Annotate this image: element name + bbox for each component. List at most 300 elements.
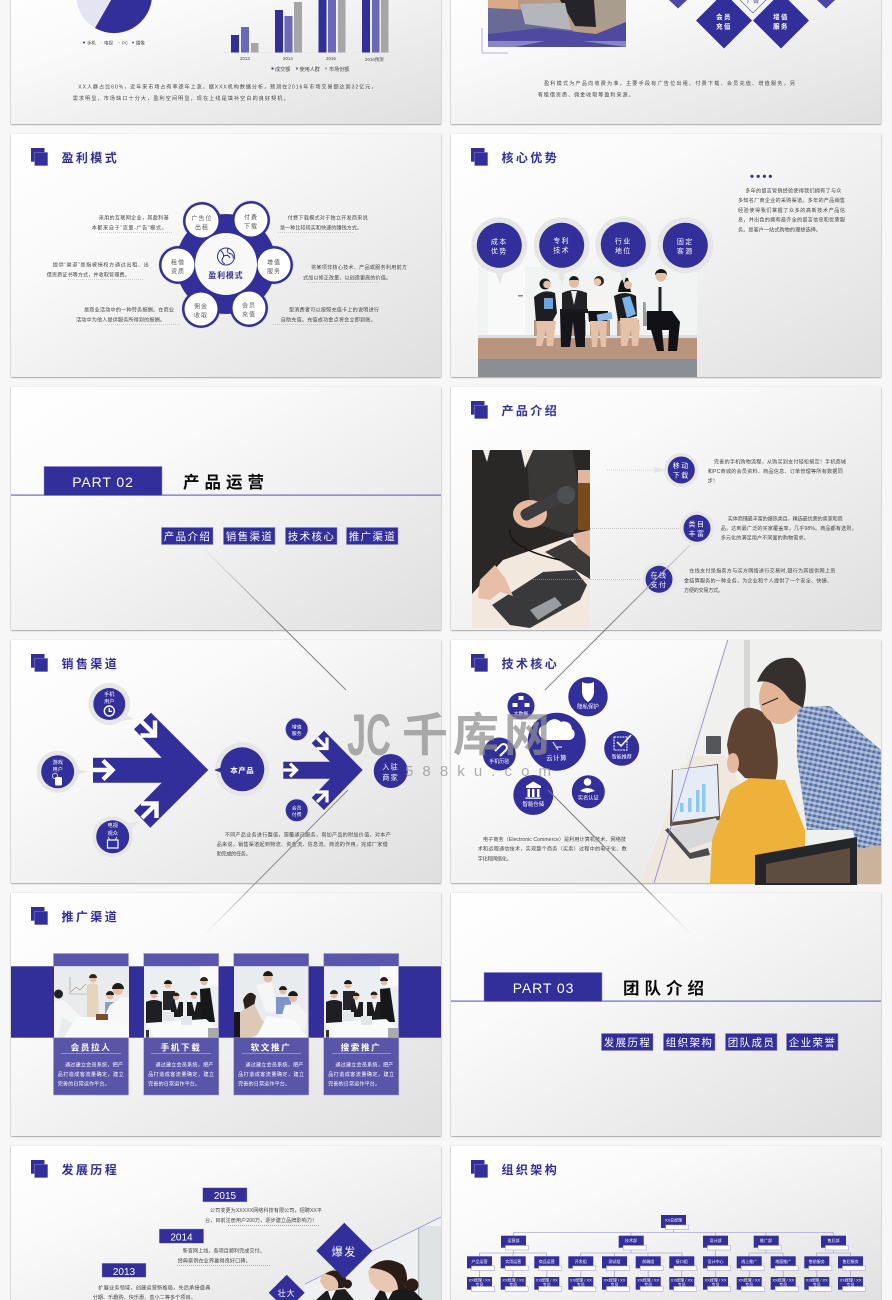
diamond: member recharge: 充值 [716, 22, 732, 30]
badge: mobile download: 移动 [673, 461, 690, 470]
text: channel note: 品来说，销售渠道起到物流、资金流、信息流、商流的作用，完成厂家借 [217, 841, 388, 848]
node: value-added: 增值 [267, 258, 281, 266]
dashed connector [531, 470, 680, 579]
pin: industry position: 行业 [615, 236, 632, 246]
man [757, 658, 881, 883]
heading icon [471, 401, 488, 419]
tag: technology [286, 528, 337, 544]
four dots [750, 175, 772, 178]
slide: core advantages [451, 134, 881, 377]
text: online payment [684, 568, 835, 594]
staff row: 专员 [745, 1281, 753, 1287]
text: rich categories: 品，达到最广泛的买家覆盖率，几乎98%。商品都有选则， [721, 525, 857, 532]
photo: five people seated [478, 267, 697, 377]
badge: rich categories: 丰富 [688, 529, 706, 538]
heading icon [31, 1160, 48, 1178]
text: advantages [738, 188, 845, 234]
bar legend: 使用人群 [300, 66, 320, 73]
card: soft promotion: 通过建立会员系统，把产 [245, 1062, 303, 1068]
text: e-commerce: 电子商务（Electronic Commerce）是利用计算机技术、网络技 [483, 836, 626, 843]
year 2013 [102, 1263, 146, 1278]
heading icon [31, 148, 48, 166]
text: mobile download: 完善的手机购物流程，从购买到支付轻松搞定！手机商城 [714, 458, 846, 466]
section line [451, 1000, 881, 1002]
node: recharge [232, 292, 266, 324]
node: promotion [754, 1236, 781, 1250]
team row: 测试组 [608, 1258, 620, 1264]
tag: history [602, 1034, 653, 1050]
text: e-commerce: 术和远程通信技术，实现整个商务（买卖）过程中的电子化、数 [478, 846, 627, 853]
navy band [11, 966, 441, 1038]
org chart [467, 1215, 866, 1291]
section slide: part 03 [451, 893, 881, 1136]
text: 2014: 新官网上线，各项目顺利完成交付。 [183, 1248, 265, 1254]
staff row: 专员 [577, 1281, 585, 1287]
slide: profit overview [451, 0, 881, 124]
node: paid download: 下载 [244, 222, 258, 230]
tag: honors [786, 1034, 838, 1050]
text: 2014 [177, 1248, 270, 1266]
text: profit summary: 有租借资质、佣金收取等盈利来源。 [538, 92, 634, 99]
node: operations: 运营部 [508, 1237, 520, 1243]
badge: tv viewers: 观众 [108, 830, 118, 837]
text: 2015: 公司变更为XXXXX网络科技有限公司，招聘XX平 [210, 1207, 322, 1214]
arrow: small three-way [283, 731, 363, 810]
node: design [703, 1236, 730, 1250]
bar chart: 2013 [240, 56, 250, 61]
team row: 线上推广 [741, 1258, 757, 1264]
badge: member payment: 会员 [292, 804, 302, 812]
chair [755, 837, 857, 885]
text: profit summary: 盈利模式为产品向收费为准，主要手段有广告位出租、付费下载、会员充值、增值服务，另 [544, 80, 795, 87]
connectors [480, 1228, 850, 1277]
text: mobile download: 和PC商城的会员资料、商品信息、订单管理等所有数据同 [708, 468, 843, 475]
staff row: XX经理 / XX [704, 1276, 727, 1282]
badge: big data: 大数据 [514, 710, 528, 717]
badge: member payment [285, 799, 308, 822]
node: after-sales [821, 1236, 848, 1250]
text: mobile download [708, 458, 846, 485]
text: channel note: 助完成的任务。 [217, 851, 251, 858]
photo: two businesswomen [300, 1217, 441, 1300]
badge: real-name [572, 775, 605, 808]
slide: profit model [11, 134, 441, 377]
staff row: XX经理 / XX [570, 1276, 592, 1282]
text: 2014: 经典案例在业界赢得良好口碑。 [178, 1257, 251, 1264]
staff row: XX经理 / XX [772, 1276, 795, 1282]
woman [710, 708, 805, 883]
text: market analysis: 需求明显，市场缺口十分大，盈利空间明显，现在上线是填补空白的良好契机。 [73, 95, 289, 102]
badge: real-name: 实名认证 [578, 794, 599, 802]
node: general manager [661, 1215, 689, 1230]
badge: value-added service: 增值 [292, 724, 302, 730]
text: mobile download: 步！ [708, 479, 718, 485]
team row: 商品运营 [539, 1258, 555, 1264]
note: leasing: 提供“渠道”是指被授权方通过出租、出 [53, 262, 149, 268]
badge: mobile users: 手机 [104, 690, 115, 698]
slide: technology core [451, 640, 881, 885]
pin: cost advantage: 成本 [491, 237, 508, 246]
photo: two people at laptop [640, 640, 881, 885]
bar chart: 2016预测 [365, 56, 384, 63]
card: mobile download: 品打造成客流量确定，建立 [148, 1071, 214, 1078]
bar chart [223, 0, 397, 63]
badge: this product: 本产品 [230, 765, 254, 775]
pie legend: 电视 [104, 40, 113, 46]
text: online payment: 在线支付是指卖方与买方网络进行交易时,银行为其提供网上资 [689, 568, 835, 575]
section title: 产品运营 [183, 473, 269, 492]
bar legend: 市场份额 [329, 66, 349, 73]
badge: game users: 用户 [53, 765, 63, 773]
heading icon [471, 654, 488, 672]
pin: patent technology: 专利 [553, 236, 570, 245]
note: value-added [303, 264, 407, 282]
tag: product intro [162, 528, 213, 544]
card: mobile download: 手机下载 [161, 1041, 201, 1052]
note: leasing: 借资质证书等方式，并收取管理费。 [47, 272, 130, 278]
tag: members: 团队成员 [728, 1036, 775, 1049]
photo: team at table [324, 966, 398, 1038]
badge: cloud computing [528, 713, 586, 771]
badge: online payment [642, 562, 676, 596]
staff row: 专员 [678, 1281, 686, 1287]
staff row: 专员 [476, 1281, 484, 1287]
node: ad space: 出租 [195, 224, 209, 232]
staff row: 专员 [779, 1281, 787, 1287]
year 2015 [203, 1188, 247, 1202]
card: soft promotion: 品打造成客流量确定，建立 [238, 1071, 304, 1078]
heading: 发展历程 [62, 1162, 119, 1177]
slide: market data charts [11, 0, 441, 124]
text: e-commerce [478, 836, 627, 862]
team row: 设计中心 [708, 1258, 724, 1264]
tag: promotion: 推广渠道 [349, 530, 396, 543]
diamond: partial [669, 0, 687, 8]
node: commission: 收取 [194, 312, 208, 320]
text: 2013 [93, 1284, 210, 1300]
note: recharge: 型消费者可以按照充值卡上的说明进行 [289, 306, 379, 314]
badge: merchant: 入驻 [382, 762, 399, 772]
diamond: member recharge [696, 0, 752, 48]
note: advertising: 采用的互联网企业，其盈利基 [99, 214, 169, 222]
person 4 [614, 278, 640, 346]
text: 2015 [205, 1207, 322, 1225]
badge: game users: 游戏 [53, 758, 63, 766]
node: leasing: 租借 [171, 258, 185, 266]
tag: organization: 组织架构 [666, 1036, 713, 1049]
badge: smart storage: 智能仓储 [523, 800, 545, 808]
staff row: XX经理 / XX [839, 1276, 862, 1282]
staff row [467, 1276, 866, 1291]
card: search promotion: 完善的日常运作平台。 [328, 1081, 380, 1088]
text: channel note: 不同产品业务进行整值，需覆通已服务，增加产品的附加价值，对本产 [225, 831, 391, 838]
person 3 [588, 276, 613, 347]
badge: privacy: 隐私保护 [577, 702, 599, 710]
icon: globe [218, 248, 234, 265]
bar legend: 成交额 [275, 66, 290, 73]
diamond: value-added service: 增值 [773, 12, 789, 21]
node: technology [619, 1236, 646, 1250]
heading: 核心优势 [502, 150, 559, 165]
person 2 [560, 276, 589, 347]
card: soft promotion: 软文推广 [251, 1041, 291, 1052]
text: advantages: 多年的留言管销经验使得我们拥有了与众 [745, 188, 841, 194]
node: ad space [186, 204, 218, 238]
card: search promotion: 搜索推广 [341, 1041, 381, 1052]
text: rich categories [721, 516, 857, 542]
node: paid download [234, 204, 268, 236]
accent line [654, 640, 728, 883]
pin: stable customers: 客源 [677, 246, 694, 256]
text: advantages: 多知名厂商企业的采购渠道。多年的产品销售 [738, 197, 845, 204]
pin: cost advantage: 优势 [491, 246, 508, 256]
team row: 售前服务 [809, 1258, 825, 1264]
badge: cloud computing: 云计算 [546, 753, 567, 762]
part label: PART 02 [72, 474, 134, 490]
team row: 开发组 [575, 1258, 587, 1264]
card: soft promotion: 完善的日常运作平台。 [238, 1081, 290, 1088]
team row: 前端组 [642, 1258, 654, 1264]
heading: 推广渠道 [62, 909, 119, 924]
note: value-added: 将某项非核心技术、产品或服务利用前方 [311, 264, 407, 271]
heading: 盈利模式 [62, 150, 119, 165]
text: advantages: 息，并出色的拥有最齐全的留言信息和优质服 [738, 217, 845, 224]
badge: mobile download: 下载 [673, 470, 690, 480]
photo: laptop meeting [488, 0, 626, 47]
staff row: XX经理 / XX [671, 1276, 693, 1282]
staff row: XX经理 / XX [637, 1276, 660, 1282]
badge: merchant: 商家 [382, 773, 399, 782]
part label [44, 466, 162, 496]
staff row: 专员 [543, 1281, 551, 1287]
node: technology: 技术部 [625, 1237, 637, 1243]
note: recharge: 自助充值。充值成功金点将会立即到账。 [281, 316, 376, 324]
node: recharge: 会员 [242, 302, 256, 310]
text: market analysis: XX人群占比60%，近年来市场占有率逐年上涨。据XXX机构数据分析，预测在2016年市场交易额达到32亿元， [78, 84, 376, 91]
watermark logo and text: JC [347, 703, 391, 768]
badge: merchant [374, 754, 408, 788]
pin: stable customers [657, 217, 713, 273]
badge: mobile verify [483, 738, 516, 770]
person 1 [534, 278, 557, 346]
staff row: 专员 [509, 1281, 517, 1287]
pin: industry position: 地位 [615, 246, 632, 255]
text: profit summary [538, 80, 795, 99]
year 2013: 2013 [113, 1267, 136, 1278]
diamond: burst [316, 1223, 372, 1279]
pie legend: 摄像 [136, 40, 145, 46]
note: value-added: 式加以修正改量，以创造更高的价值。 [303, 274, 391, 282]
node: after-sales: 售后部 [828, 1237, 840, 1243]
diamond: value-added service: 服务 [773, 22, 789, 30]
badge: rich categories: 类目 [688, 520, 706, 528]
node: leasing [162, 248, 194, 282]
staff row: 专员 [813, 1281, 821, 1287]
slide: sales channels [11, 640, 441, 883]
text: e-commerce: 字化和网络化。 [478, 855, 512, 862]
diamond: member recharge: 会员 [716, 12, 732, 21]
note: commission: 是商业活动中的一种劳务报酬。在商业 [84, 306, 174, 314]
watermark diagonal lines [201, 545, 693, 936]
tag: promotion [346, 528, 398, 544]
heading icon [31, 654, 48, 672]
staff row: 专员 [610, 1281, 618, 1287]
team row: 产品运营 [472, 1258, 488, 1264]
card: soft promotion [234, 954, 309, 1095]
badge: value-added service: 服务 [292, 730, 302, 737]
tag: sales channels: 销售渠道 [226, 530, 273, 543]
pin: stable customers: 固定 [677, 237, 694, 246]
staff row: 专员 [644, 1281, 652, 1287]
diamond: burst: 爆发 [332, 1244, 357, 1258]
node: value-added [258, 248, 290, 282]
photo: presentation [54, 966, 129, 1038]
section line [11, 494, 441, 496]
node: ad space: 广告位 [191, 214, 213, 222]
card: search promotion: 品打造成客流量确定，建立 [328, 1071, 394, 1078]
team row: 售后服务 [842, 1258, 858, 1264]
diamond: growth [269, 1275, 305, 1300]
team row: 接口组 [676, 1258, 688, 1264]
decorative corner bracket [482, 28, 508, 53]
pin: industry position [595, 216, 651, 284]
staff row: 专员 [846, 1281, 854, 1287]
node: general manager: XX总经理 [665, 1216, 682, 1222]
staff row: XX经理 / XX [738, 1276, 761, 1282]
card: member referral: 完善的日常运作平台。 [58, 1081, 110, 1088]
card: mobile download: 通过建立会员系统，把产 [155, 1062, 213, 1068]
tag: history: 发展历程 [604, 1036, 651, 1049]
slide: history timeline [11, 1146, 441, 1300]
text: channel note [217, 831, 391, 858]
section title: 团队介绍 [623, 979, 709, 998]
text: advantages: 经验使得我们掌握了众多的高新技术产品信 [738, 207, 845, 214]
note: commission: 活动中为他人提供服务所得到的报酬。 [76, 316, 165, 324]
laptop [665, 764, 722, 859]
watermark logo and text: 588ku.com [405, 763, 551, 780]
badge: game users [37, 751, 88, 793]
note: advertising [92, 214, 173, 232]
badge: this product [214, 742, 269, 796]
staff row: XX经理 / XX [502, 1276, 525, 1282]
pie legend: PC [122, 40, 128, 46]
badge: online payment: 在线 [650, 570, 668, 580]
badge: value-added service [285, 718, 308, 741]
diamond: value-added service [753, 0, 809, 48]
staff row: XX经理 / XX [603, 1276, 626, 1282]
heading: 技术核心 [502, 656, 559, 671]
staff row: XX经理 / XX [536, 1276, 558, 1282]
tag: sales channels [224, 528, 275, 544]
badge: smart recommendation [604, 731, 639, 766]
staff row: XX经理 / XX [468, 1276, 491, 1282]
diamond: outlined [736, 0, 770, 13]
part label: PART 03 [513, 980, 574, 996]
section slide: part 02 [11, 387, 441, 630]
center label: 盈利模式 [208, 270, 244, 280]
node: operations [501, 1236, 528, 1250]
pin: patent technology [534, 217, 590, 286]
pin: patent technology: 技术 [553, 246, 570, 254]
badge: smart storage [513, 775, 553, 815]
badge: mobile verify: 手机历验 [489, 758, 509, 765]
text: rich categories: 实体商铺最丰富的爆热类目，精选最优质的卖家和商 [728, 516, 843, 522]
pie chart [76, 0, 152, 33]
tag: organization [664, 1034, 715, 1050]
tag: technology: 技术核心 [288, 530, 335, 543]
note: recharge [273, 306, 379, 324]
arrow: large three-way [93, 713, 208, 828]
node: value-added: 服务 [267, 268, 281, 276]
badge: mobile users [88, 683, 134, 725]
node: commission [184, 292, 218, 326]
flower diagram [158, 200, 294, 329]
photo: team at table [144, 966, 218, 1038]
text: 2015: 台，目前注册用户200万，逐步建立品牌影响力！ [205, 1217, 317, 1224]
text: market analysis [73, 84, 376, 102]
staff row: XX经理 / XX [806, 1276, 828, 1282]
heading icon [471, 1160, 488, 1178]
year 2014: 2014 [170, 1232, 193, 1244]
slide: promotion channels [11, 893, 441, 1136]
note: download [278, 214, 368, 232]
slide: product intro [451, 387, 881, 630]
node: design: 设计部 [710, 1237, 722, 1243]
card: member referral: 会员拉人 [71, 1041, 111, 1052]
badge: tv viewers: 电视 [108, 821, 118, 829]
tag: product intro: 产品介绍 [164, 530, 211, 543]
badge: tv viewers [92, 816, 140, 857]
heading icon [31, 907, 48, 925]
badge: mobile users: 用户 [104, 697, 114, 705]
slide: organization chart [451, 1146, 881, 1300]
bar chart: 2014 [283, 56, 293, 61]
staff row: 专员 [712, 1281, 720, 1287]
badge: big data [508, 692, 534, 720]
node: recharge: 充值 [242, 310, 256, 318]
card: member referral: 通过建立会员系统，把产 [65, 1062, 123, 1068]
card: search promotion [324, 954, 399, 1095]
year 2015: 2015 [214, 1191, 237, 1202]
pie legend [83, 40, 145, 46]
text: online payment: 金结算服务的一种业务，为企业和个人提供了一个安全、快捷、 [684, 577, 832, 584]
diamond: growth: 壮大 [278, 1288, 296, 1298]
text: online payment: 方便的交易方式。 [684, 587, 723, 594]
watermark logo and text: 千库网 [402, 709, 550, 761]
badge: rich categories [680, 511, 714, 545]
year 2014 [159, 1229, 204, 1244]
person 5 [645, 269, 680, 351]
heading: 产品介绍 [502, 403, 559, 418]
note: leasing [47, 262, 149, 280]
tag: honors: 企业荣誉 [789, 1036, 836, 1049]
heading: 组织架构 [502, 1162, 559, 1177]
pin: cost advantage [471, 217, 527, 285]
bar legend [272, 66, 349, 73]
diamond: partial [817, 0, 835, 8]
photo: telephone [472, 450, 590, 628]
text: 2013: 扩展业务领域，创建运营新格局，先后承接盛典 [98, 1284, 210, 1291]
note: commission [76, 306, 180, 324]
badge: mobile download [654, 453, 698, 487]
card: member referral [54, 954, 129, 1095]
part label [484, 972, 602, 1002]
text: rich categories: 多元化的满足用户不同面的购物需求。 [721, 535, 809, 542]
note: download: 是一种比较现实和快速的赚钱方式。 [280, 224, 362, 232]
note: download: 付费下载模式对于独立开发商来说 [288, 214, 368, 222]
heading icon [471, 148, 488, 166]
node: promotion: 推广部 [760, 1237, 772, 1243]
